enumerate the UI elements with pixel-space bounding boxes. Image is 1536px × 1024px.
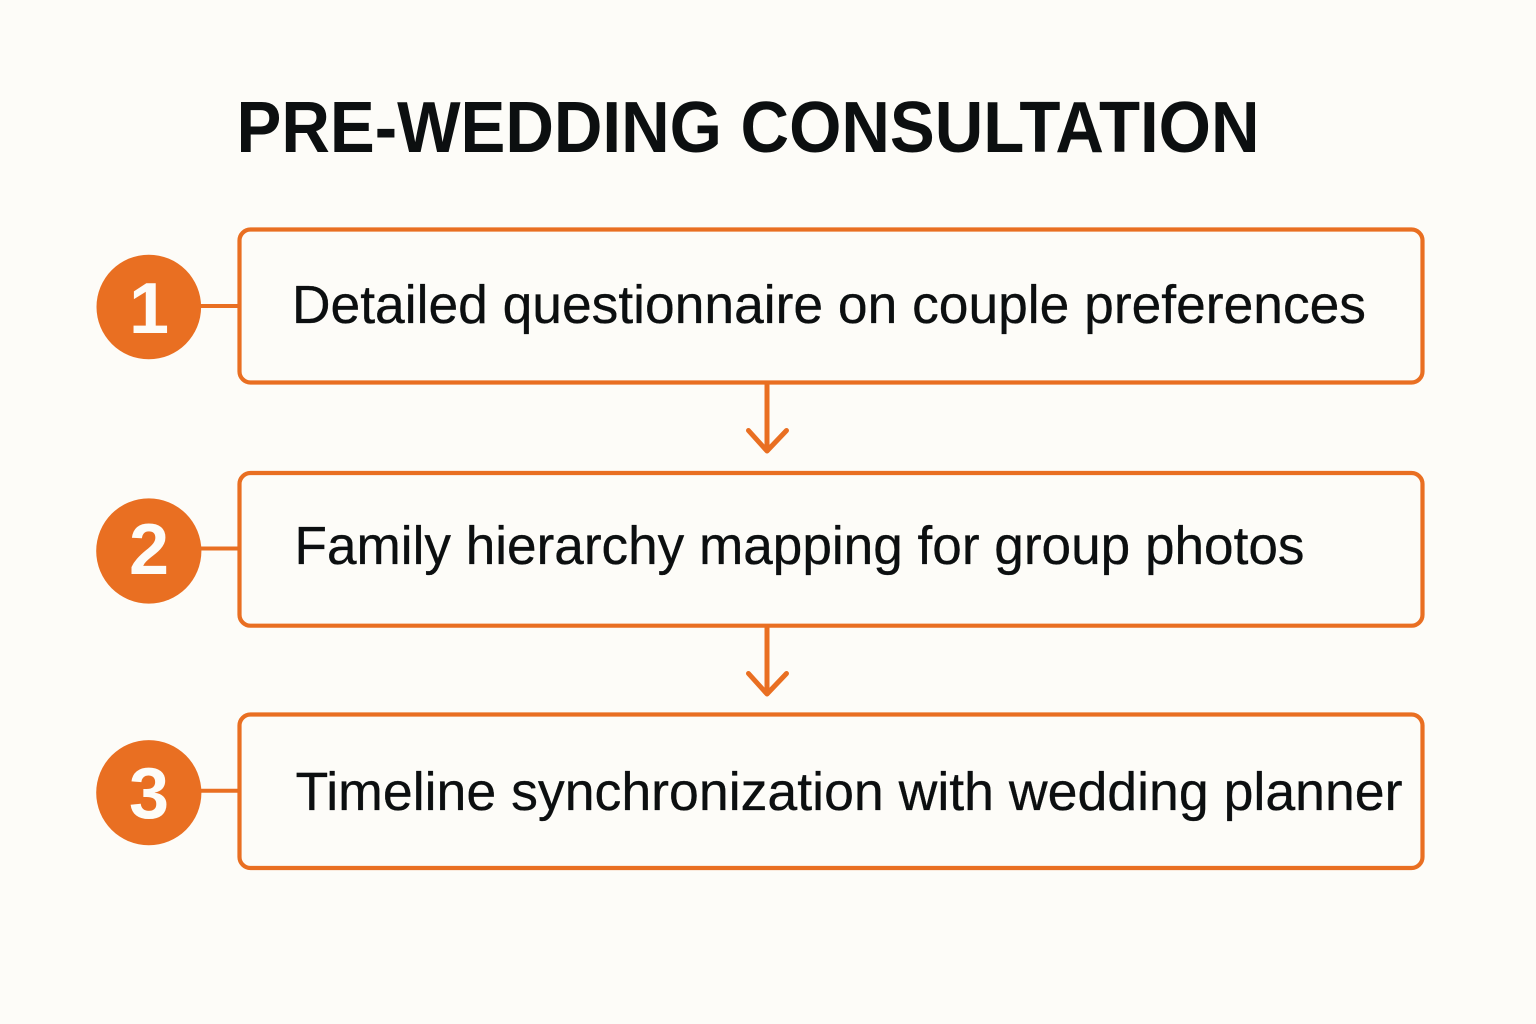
step 2 text: Family hierarchy mapping for group photos <box>294 516 1304 576</box>
step 2 number badge <box>96 498 201 604</box>
step 2 box <box>240 473 1422 626</box>
title: PRE-WEDDING CONSULTATION <box>236 88 1260 168</box>
step 2 number badge: 2 <box>129 510 169 590</box>
arrow 1 to 2 <box>748 384 786 451</box>
step 1 <box>96 230 1422 382</box>
step 3 number badge: 3 <box>129 754 169 834</box>
step 3 box <box>240 714 1422 868</box>
step 3 <box>96 714 1423 868</box>
step 2 connector <box>195 546 240 550</box>
step 3 text: Timeline synchronization with wedding planner <box>296 762 1403 822</box>
step 1 number badge <box>96 255 201 359</box>
step 3 number badge <box>96 740 201 845</box>
step 1 number badge: 1 <box>129 269 169 349</box>
step 1 box <box>240 230 1422 382</box>
step 2 <box>96 473 1423 626</box>
step 3 connector <box>195 789 240 793</box>
arrow 2 to 3 <box>748 627 786 694</box>
step 1 connector <box>195 304 240 308</box>
step 1 text: Detailed questionnaire on couple preferences <box>292 275 1366 335</box>
